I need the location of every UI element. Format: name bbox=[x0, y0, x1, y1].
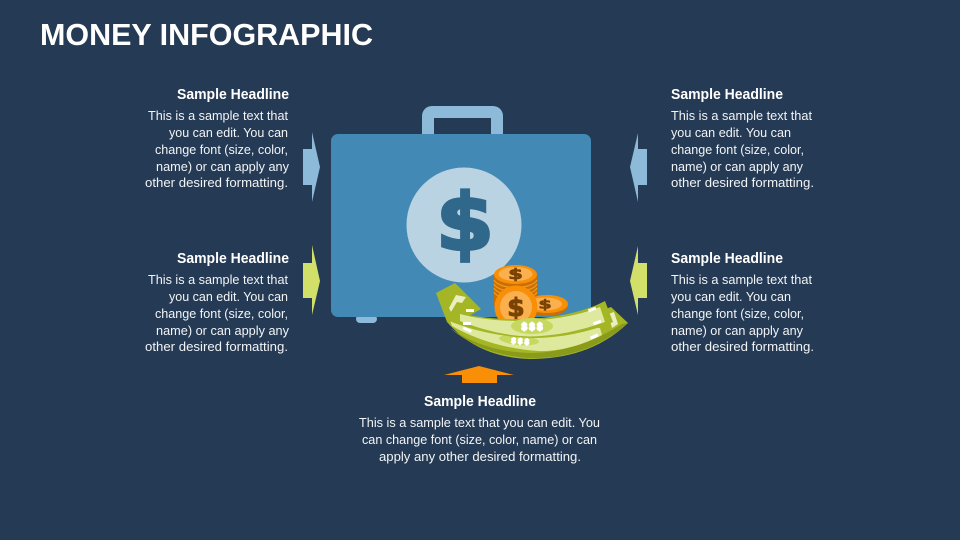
text block: top left: other desired formatting. bbox=[145, 175, 288, 190]
text block: top right: you can edit. You can bbox=[671, 125, 791, 140]
text block: top right: Sample Headline bbox=[671, 87, 783, 103]
text block: top left: change font (size, color, bbox=[155, 142, 288, 157]
arrow: bottom bbox=[444, 366, 514, 383]
text block: top right: name) or can apply any bbox=[671, 159, 803, 174]
text block: top left bbox=[145, 87, 289, 190]
lower bill bbox=[447, 307, 628, 359]
text block: top left: you can edit. You can bbox=[169, 125, 288, 140]
text block: top right: This is a sample text that bbox=[671, 108, 812, 123]
text block: top left: Sample Headline bbox=[177, 87, 289, 103]
text block: middle left: This is a sample text that bbox=[148, 272, 288, 287]
text block: top left: This is a sample text that bbox=[148, 108, 288, 123]
text block: middle left: change font (size, color, bbox=[155, 306, 288, 321]
icon: coins: $ bbox=[507, 293, 525, 322]
lower bill: $ $ $ bbox=[511, 336, 530, 347]
text block: bottom centre bbox=[359, 394, 600, 464]
icon: coins bbox=[494, 265, 568, 328]
text block: middle left: Sample Headline bbox=[177, 251, 289, 267]
text block: middle left: other desired formatting. bbox=[145, 339, 288, 354]
back left bill bbox=[436, 283, 481, 322]
text block: middle right bbox=[671, 251, 814, 354]
icon: briefcase: $ bbox=[436, 177, 494, 268]
text block: middle right: name) or can apply any bbox=[671, 323, 803, 338]
text block: top left: name) or can apply any bbox=[156, 159, 289, 174]
arrow: middle left bbox=[303, 245, 320, 315]
icon: banknotes bbox=[436, 283, 628, 359]
text block: bottom centre: This is a sample text that you can edit. You bbox=[359, 415, 600, 430]
icon: coins: $ bbox=[538, 297, 552, 311]
text block: top right: other desired formatting. bbox=[671, 175, 814, 190]
text block: middle right: Sample Headline bbox=[671, 251, 783, 267]
top bill: $$$ bbox=[522, 322, 543, 333]
arrow: top left bbox=[303, 132, 320, 202]
arrow: middle right bbox=[630, 246, 647, 315]
text block: middle right: change font (size, color, bbox=[671, 306, 804, 321]
text block: bottom centre: apply any other desired formatting. bbox=[379, 449, 581, 464]
text block: middle left: name) or can apply any bbox=[156, 323, 289, 338]
text block: middle right: other desired formatting. bbox=[671, 339, 814, 354]
text block: middle left: you can edit. You can bbox=[169, 289, 288, 304]
icon: briefcase bbox=[331, 106, 591, 323]
text block: top right: change font (size, color, bbox=[671, 142, 804, 157]
arrow: top right bbox=[630, 133, 647, 202]
top bill bbox=[447, 301, 613, 338]
text block: middle left bbox=[145, 251, 289, 354]
text block: bottom centre: can change font (size, color, name) or can bbox=[362, 432, 597, 447]
text block: bottom centre: Sample Headline bbox=[424, 394, 536, 410]
text block: middle right: you can edit. You can bbox=[671, 289, 791, 304]
text block: top right bbox=[671, 87, 814, 190]
icon: coins: $ bbox=[508, 266, 523, 283]
text block: middle right: This is a sample text that bbox=[671, 272, 812, 287]
title: MONEY INFOGRAPHIC bbox=[40, 17, 373, 52]
